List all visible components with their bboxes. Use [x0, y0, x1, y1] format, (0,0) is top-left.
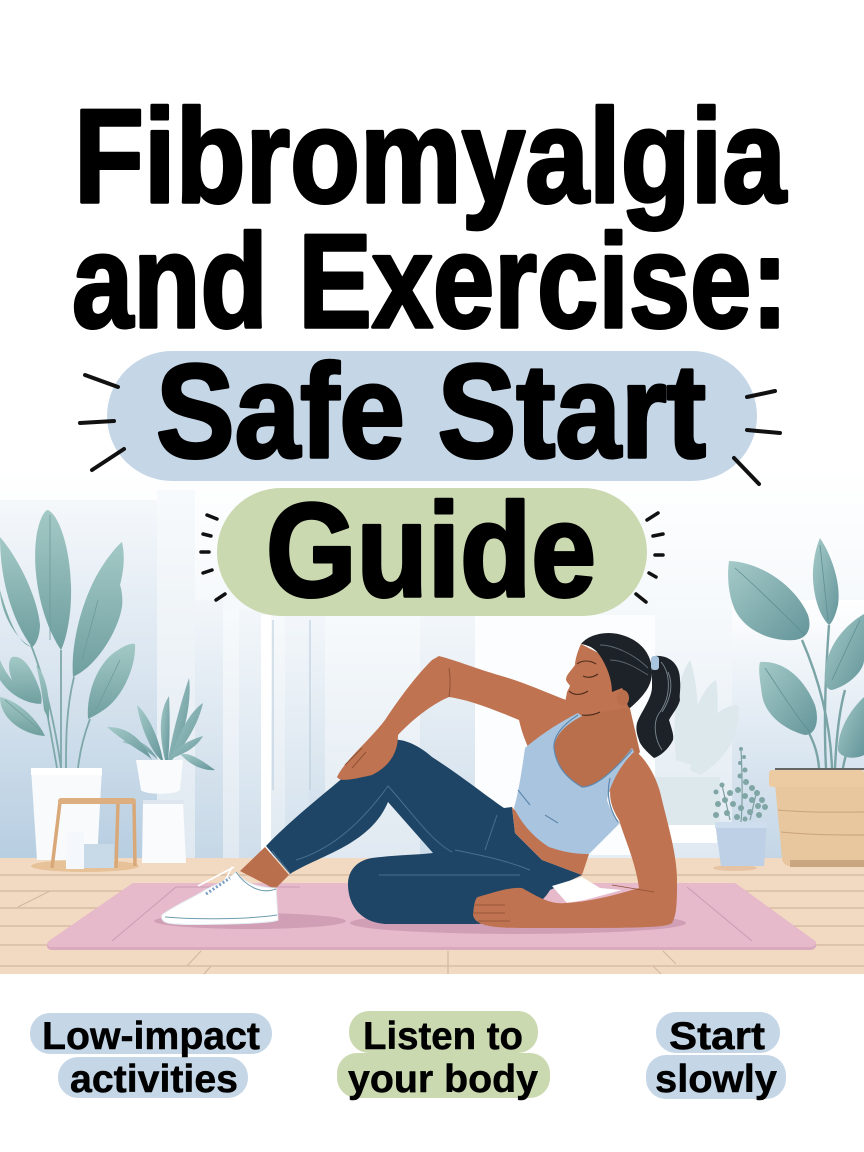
highlight: safe start: Safe Start	[156, 336, 706, 486]
right large plant	[728, 538, 864, 768]
ponytail	[636, 656, 680, 758]
ankle	[240, 847, 289, 889]
midriff	[512, 807, 589, 875]
sunburst: guide	[201, 513, 663, 602]
left large white pot	[31, 768, 102, 860]
highlight: guide: Guide	[266, 475, 596, 625]
chest and neck	[552, 700, 640, 795]
label: start slowly	[646, 1012, 786, 1101]
wooden stool with jars	[31, 798, 139, 872]
title: and Exercise:	[72, 206, 788, 356]
woman stretching	[162, 633, 680, 928]
raised arm and shoulder	[337, 656, 580, 780]
label: listen to your body	[337, 1011, 550, 1101]
sneaker	[162, 867, 278, 924]
yoga mat	[47, 883, 816, 950]
supporting arm	[473, 748, 677, 928]
right tan pot	[769, 768, 864, 867]
leggings	[266, 740, 582, 924]
sports top	[514, 713, 634, 854]
label: low-impact activities	[30, 1013, 272, 1101]
hair band	[651, 656, 659, 670]
title: Fibromyalgia	[74, 81, 787, 231]
label: low-impact activities: activities	[70, 1058, 238, 1101]
label: listen to your body: Listen to	[363, 1015, 523, 1058]
label: start slowly: slowly	[655, 1058, 777, 1101]
faded background plant	[655, 660, 739, 827]
face	[566, 644, 634, 715]
hair	[581, 633, 652, 708]
ear	[617, 690, 629, 706]
rear foot white sock	[552, 877, 622, 903]
label: start slowly: Start	[669, 1015, 765, 1058]
label: listen to your body: your body	[348, 1058, 538, 1101]
small herb in glass pot	[713, 747, 768, 871]
label: low-impact activities: Low-impact	[42, 1015, 260, 1058]
background room	[0, 470, 864, 860]
small plant with white stand	[107, 678, 215, 863]
floor	[0, 858, 864, 974]
left large plant	[0, 510, 135, 768]
title	[72, 81, 788, 356]
sunburst: safe start	[80, 375, 780, 484]
